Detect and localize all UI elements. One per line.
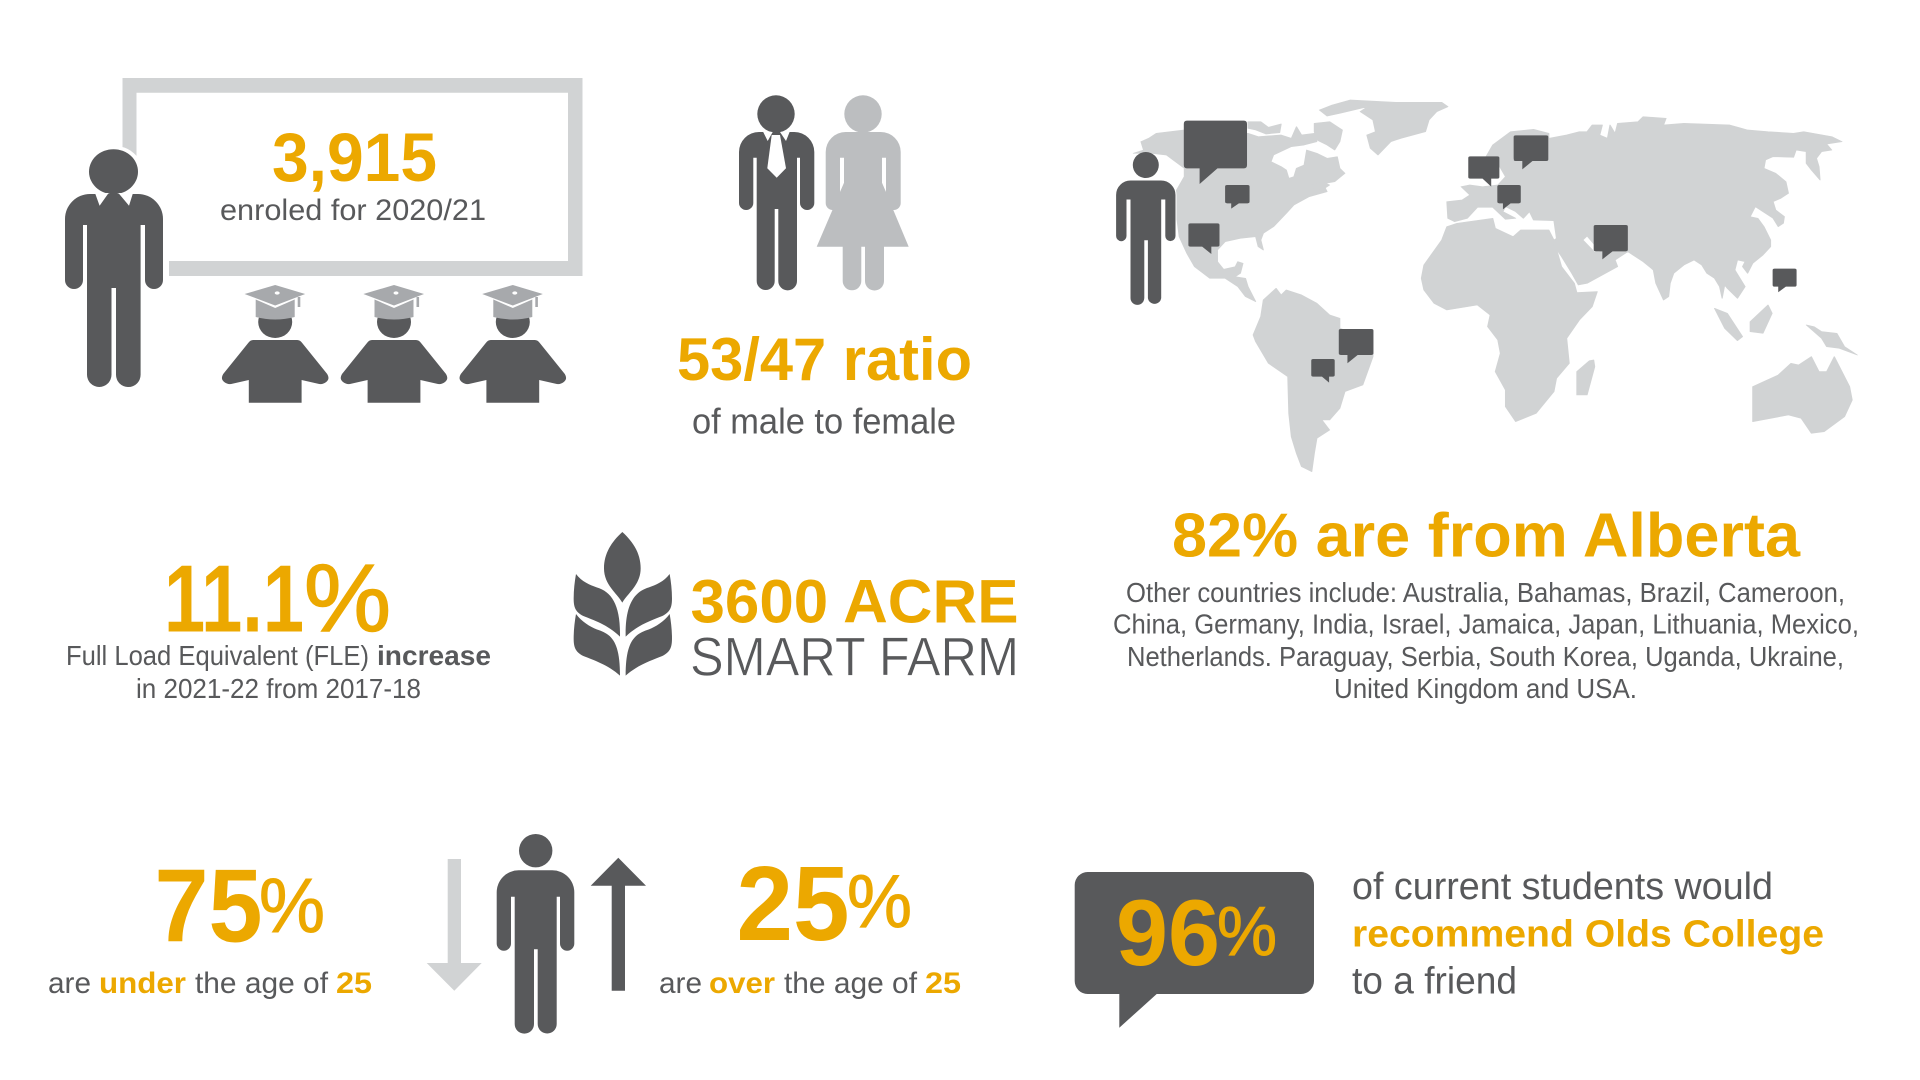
FLE caption line 1: Full Load Equivalent (FLE): [66, 640, 369, 671]
under 25 caption: the age of: [195, 967, 329, 1000]
under 25 percent sign: %: [259, 863, 325, 949]
enrolment number: 3,915: [272, 119, 437, 196]
panel: age over 25: [659, 845, 961, 1000]
panel: age icon: [427, 834, 646, 1034]
ratio caption: of male to female: [692, 400, 956, 441]
ratio heading: 53/47 ratio: [677, 326, 972, 393]
recommendation number: 96: [1116, 880, 1220, 985]
icon: person: [497, 834, 574, 1034]
over 25 caption: the age of: [784, 967, 918, 1000]
icon: person on map: [1116, 152, 1176, 305]
recommendation text: to a friend: [1352, 960, 1517, 1002]
icon: graduate 2: [341, 284, 447, 403]
Alberta heading: 82% are from Alberta: [1172, 502, 1801, 571]
panel: world map: [1113, 100, 1859, 704]
over 25 caption: over: [709, 967, 775, 1000]
recommendation text: [1352, 866, 1824, 1002]
over 25 percent sign: %: [847, 859, 912, 943]
countries list: United Kingdom and USA.: [1334, 673, 1637, 704]
over 25 caption: are: [659, 967, 702, 1000]
panel: FLE increase: [66, 545, 491, 704]
under 25 caption: 25: [336, 967, 372, 1000]
icon: teacher: [65, 146, 163, 387]
farm subheading: SMART FARM: [690, 626, 1019, 688]
countries list: Netherlands. Paraguay, Serbia, South Korea, Uganda, Ukraine,: [1127, 641, 1844, 672]
FLE percent sign: %: [304, 545, 391, 652]
under 25 caption: are: [48, 967, 91, 1000]
arrow: down: [427, 859, 482, 991]
icon: wheat: [574, 532, 672, 676]
countries list: China, Germany, India, Israel, Jamaica, Japan, Lithuania, Mexico,: [1113, 608, 1859, 640]
countries list: [1113, 577, 1859, 704]
over 25 caption: 25: [925, 967, 961, 1000]
FLE caption line 1: increase: [377, 640, 491, 671]
farm heading: 3600 ACRE: [690, 568, 1018, 636]
panel: recommendation: [1075, 866, 1824, 1028]
map speech bubbles: [1184, 121, 1797, 383]
arrow: up: [591, 858, 646, 991]
FLE caption line 2: in 2021-22 from 2017-18: [136, 673, 421, 704]
icon: man: [739, 95, 814, 290]
presentation board: [122, 78, 582, 276]
speech bubble: [1075, 872, 1314, 1028]
under 25 caption: under: [99, 967, 186, 1000]
panel: smart farm: [574, 532, 1019, 688]
over 25 number: 25: [736, 845, 850, 963]
panel: enrolment: [65, 78, 582, 403]
countries list: Other countries include: Australia, Bahamas, Brazil, Cameroon,: [1126, 577, 1845, 608]
world map: [1133, 100, 1857, 472]
icon: woman: [817, 95, 909, 290]
enrolment caption: enroled for 2020/21: [220, 194, 486, 227]
recommendation percent sign: %: [1217, 892, 1277, 970]
panel: gender ratio: [677, 95, 972, 441]
panel: age under 25: [48, 849, 372, 1000]
recommendation text: of current students would: [1352, 866, 1773, 908]
recommendation text: recommend Olds College: [1352, 914, 1824, 956]
FLE number: 11.1: [164, 546, 304, 653]
under 25 number: 75: [154, 849, 262, 965]
icon: graduate 3: [460, 284, 566, 403]
icon: graduate 1: [222, 284, 328, 403]
